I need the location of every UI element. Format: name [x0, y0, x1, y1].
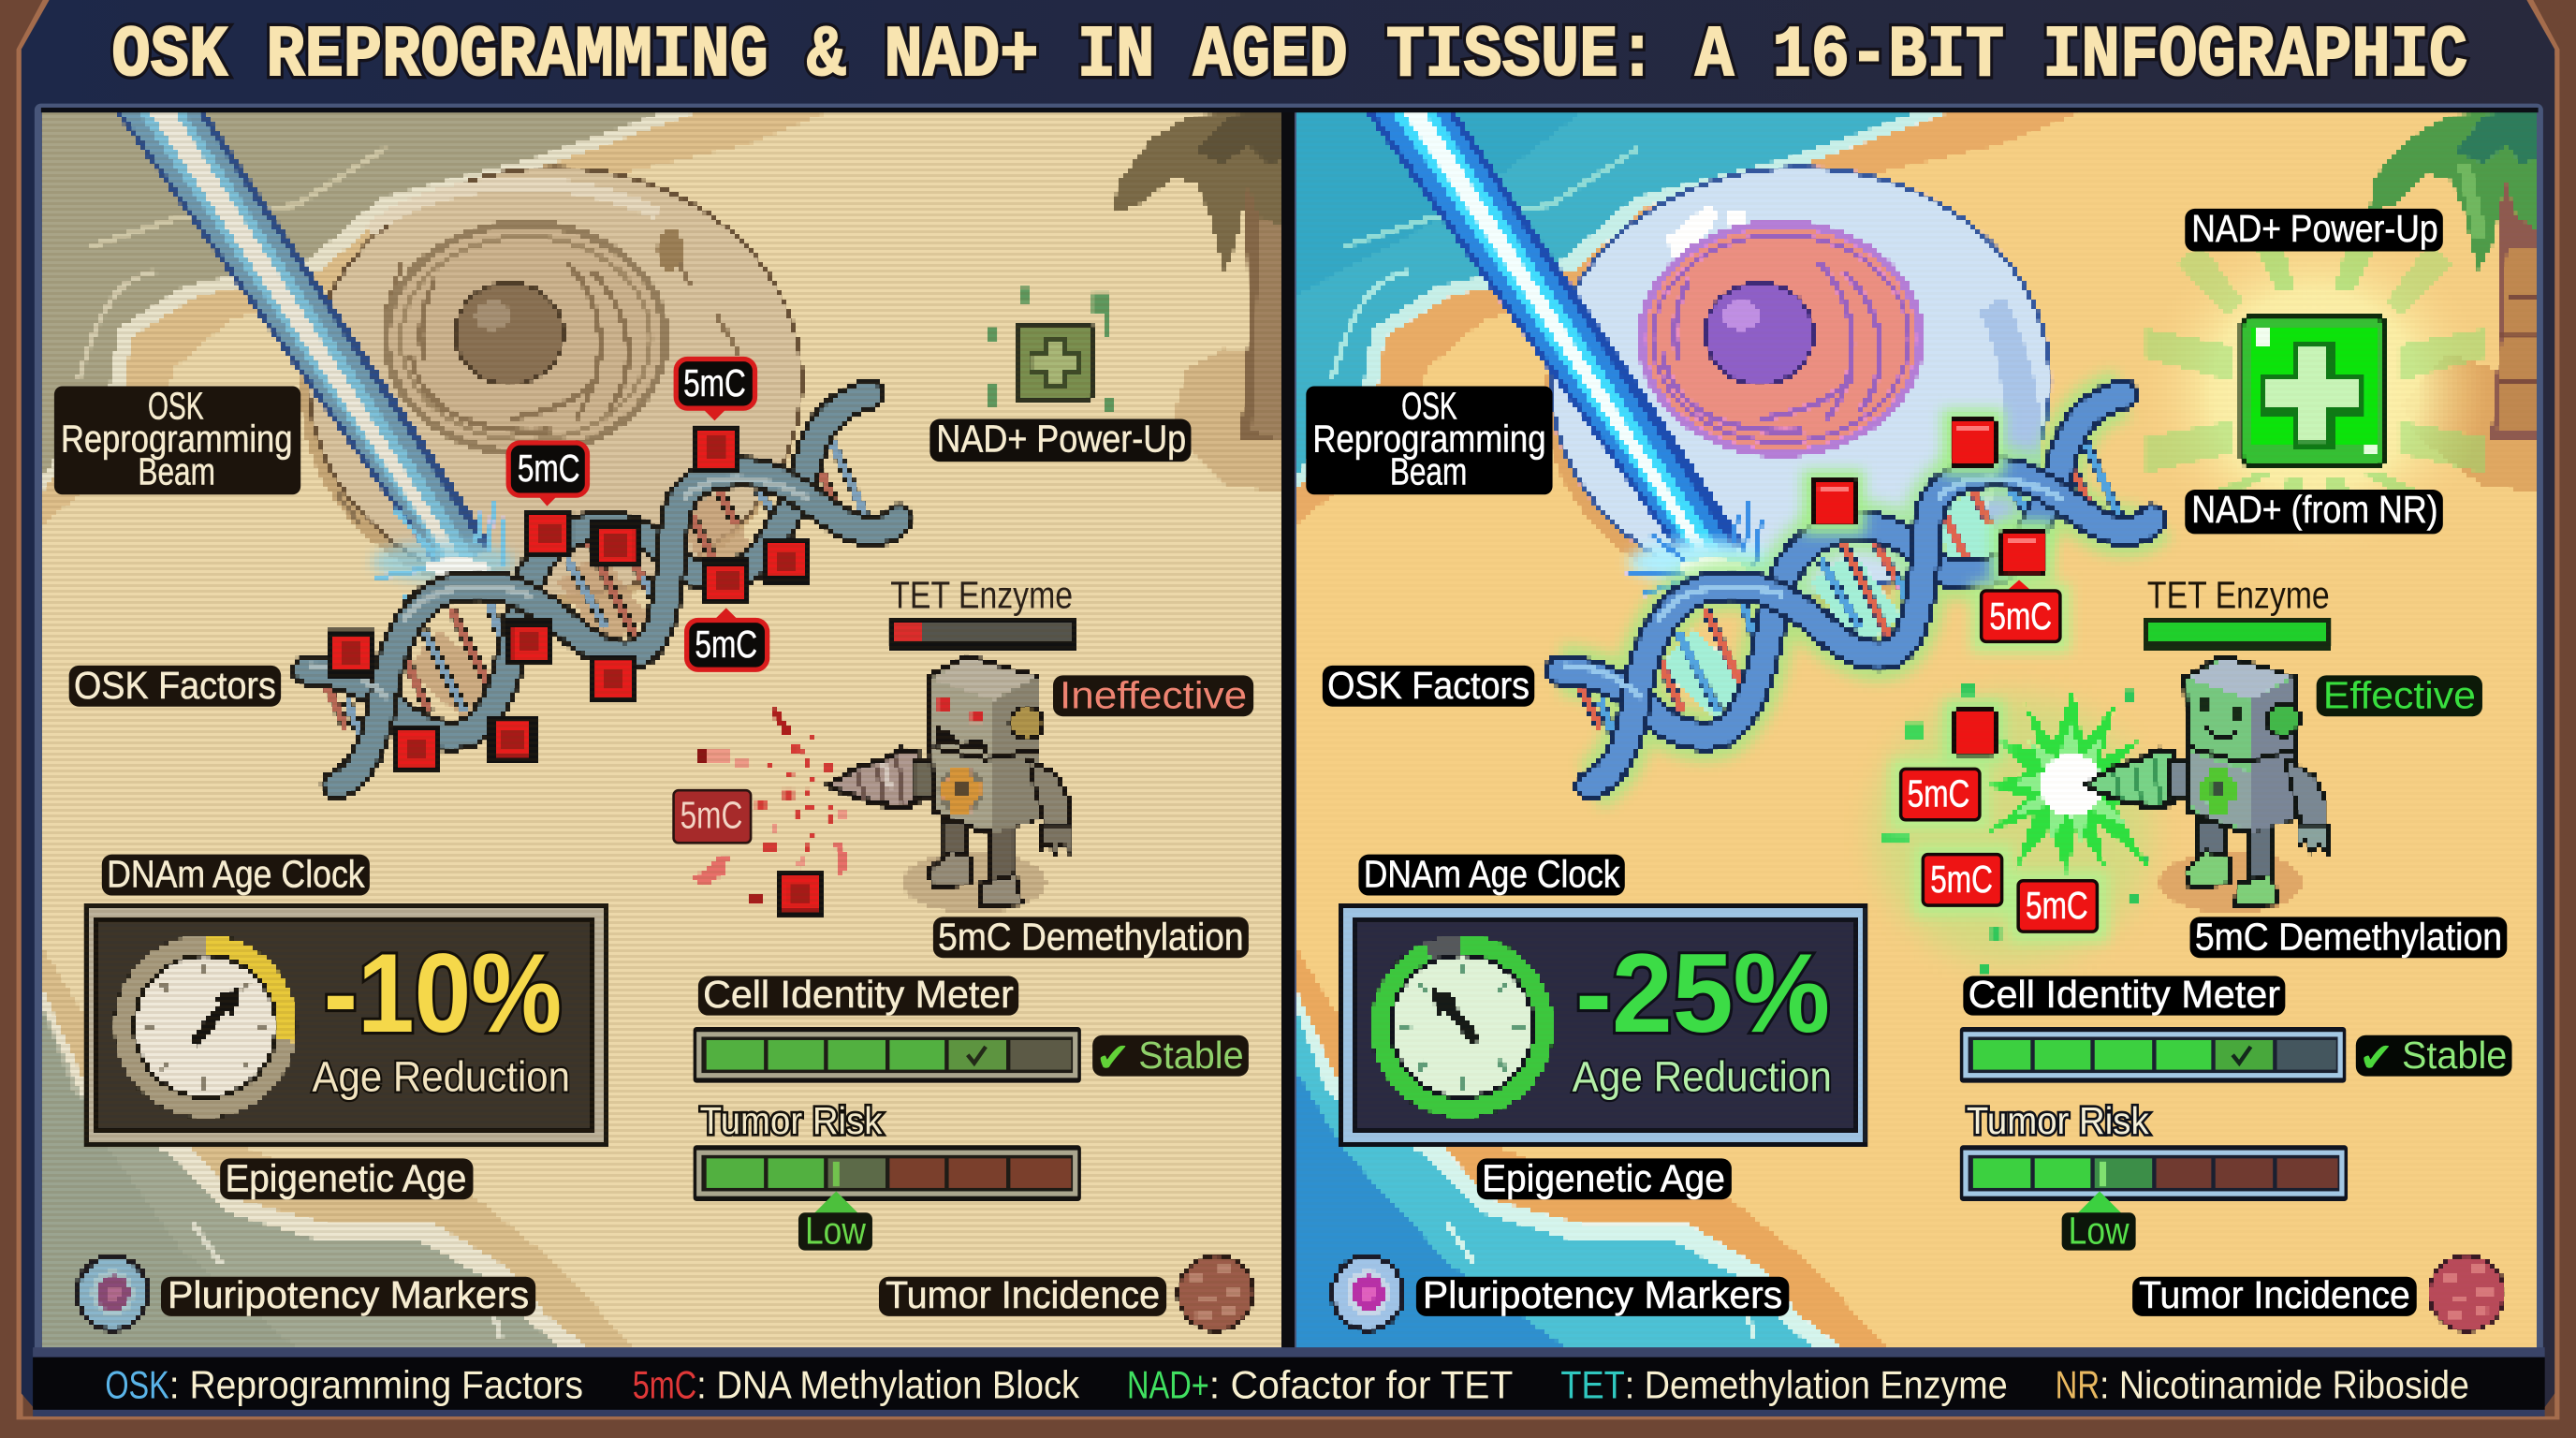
callout: 5mC [676, 359, 754, 420]
methylation blocks on DNA [1802, 409, 2054, 762]
faded 5mC block [674, 790, 751, 843]
DNAm age clock dial [1370, 934, 1554, 1119]
status: Stable: ✔ [1096, 1034, 1130, 1081]
callout: 5mC: 5mC [518, 447, 580, 490]
tumor incidence icon [1177, 1254, 1255, 1332]
status: Stable: Stable [2402, 1034, 2507, 1077]
legend: TET: : Demethylation Enzyme [1625, 1363, 2008, 1407]
legend: NAD+: NAD+ [1127, 1363, 1209, 1407]
legend: TET: TET [1560, 1363, 1625, 1407]
palm shadow on sand [2402, 353, 2539, 493]
label: Age Reduction: Age Reduction [1573, 1052, 1832, 1100]
green glow around DNA [1560, 394, 2152, 785]
callout: 5mC: 5mC [683, 361, 746, 404]
DNA helix (hypermethylated) [307, 394, 899, 785]
legend: NR: : Nicotinamide Riboside [2100, 1363, 2469, 1407]
legend: 5mC: : DNA Methylation Block [696, 1363, 1080, 1407]
legend: NR: NR [2056, 1363, 2100, 1407]
aged cell [300, 168, 801, 605]
label: Pluripotency Markers: Pluripotency Markers [1423, 1273, 1782, 1316]
TET enzyme bar: full [2143, 616, 2333, 649]
label: Tumor Incidence: Tumor Incidence [886, 1273, 1160, 1316]
block: 5mC: 5mC [2026, 884, 2088, 927]
panel inner border top [41, 108, 2539, 112]
age clock panel [1339, 902, 1869, 1147]
label: TET Enzyme: TET Enzyme [2147, 573, 2330, 616]
happy green robot with drill [2080, 655, 2328, 914]
methylation blocks on DNA [327, 424, 825, 917]
callout: 5mC [1982, 580, 2060, 641]
beach water top [41, 111, 829, 526]
label: Cell Identity Meter: Cell Identity Meter [1969, 973, 2280, 1016]
label: OSK Reprogramming Beam: Beam [1390, 450, 1467, 493]
demethylation burst [1873, 682, 2167, 976]
status: Stable [1092, 1034, 1249, 1081]
label: DNAm Age Clock: DNAm Age Clock [107, 853, 365, 896]
label: OSK Factors: OSK Factors [74, 664, 276, 707]
legend: OSK: : Reprogramming Factors [169, 1363, 583, 1407]
callout: 5mC [687, 608, 768, 669]
beach water bottom [1295, 945, 1886, 1347]
sand background [41, 111, 1281, 1347]
legend bar [33, 1347, 2545, 1416]
tumor risk meter [694, 1145, 1081, 1201]
TET enzyme bar: nearly empty [887, 616, 1077, 649]
label: Age Reduction: Age Reduction [312, 1052, 570, 1100]
block: 5mC: 5mC [1930, 858, 1993, 901]
left panel CRT scanlines [41, 111, 1281, 1347]
label: Pluripotency Markers: Pluripotency Markers [168, 1273, 529, 1316]
label: Tumor Incidence: Tumor Incidence [2139, 1273, 2410, 1316]
legend: 5mC: 5mC [633, 1363, 696, 1407]
glow behind 5mC blocks [1891, 583, 2108, 942]
pluripotency marker icon [75, 1254, 151, 1332]
label: Cell Identity Meter: Cell Identity Meter [703, 973, 1014, 1016]
label: TET Enzyme: TET Enzyme [890, 573, 1073, 616]
label: 5mC Demethylation: 5mC Demethylation [2195, 915, 2502, 958]
DNAm age clock dial [113, 934, 298, 1119]
age clock panel [82, 902, 609, 1147]
tumor risk meter [1960, 1145, 2348, 1201]
status: Ineffective: Ineffective [1060, 673, 1247, 716]
marker: Low [798, 1191, 872, 1253]
right panel faint scanlines [1295, 111, 2539, 1347]
DNA helix (clean) [1560, 394, 2152, 785]
callout: 5mC: 5mC [695, 623, 757, 666]
status: Stable: Stable [1138, 1034, 1244, 1077]
left panel illustration [41, 111, 1288, 1347]
panel: rejuvenated tissue (right) [1295, 111, 2539, 1347]
reprogramming beam [1365, 111, 1747, 568]
label: OSK Reprogramming Beam: OSK [1401, 385, 1457, 428]
beach water top [1295, 111, 2083, 526]
label: Epigenetic Age: Epigenetic Age [225, 1156, 466, 1199]
reprogramming beam [115, 111, 493, 568]
cell identity meter [694, 1027, 1081, 1083]
label: NAD+ Power-Up: NAD+ Power-Up [2191, 207, 2438, 250]
beach water bottom [41, 945, 633, 1347]
callout: 5mC: 5mC [1989, 594, 2052, 638]
status: Stable: ✔ [2359, 1034, 2393, 1081]
label: OSK Reprogramming Beam: OSK [148, 385, 204, 428]
palm tree [1114, 111, 1288, 493]
marker: Low: Low [2069, 1210, 2130, 1253]
centre divider [1281, 109, 1295, 1351]
value: -10%: -10% [324, 932, 562, 1056]
sand background [1295, 111, 2539, 1347]
label: Tumor Risk: Tumor Risk [700, 1099, 883, 1142]
label: OSK Reprogramming Beam: Reprogramming [61, 418, 292, 461]
legend: NAD+: : Cofactor for TET [1209, 1363, 1513, 1407]
panel: aged tissue (left) [41, 111, 1288, 1347]
weak NAD+ power-up icon [989, 287, 1114, 413]
rusty robot with drill [823, 655, 1071, 914]
NAD+ power-up glow rays [2144, 220, 2485, 555]
label: OSK Factors: OSK Factors [1327, 664, 1530, 707]
status: Stable [2356, 1034, 2512, 1081]
label: OSK Reprogramming Beam [1306, 385, 1553, 494]
right panel illustration [1295, 111, 2539, 1347]
tumor incidence icon [2427, 1254, 2506, 1332]
callout: 5mC [508, 443, 587, 506]
cell identity meter [1960, 1027, 2346, 1083]
palm tree [2369, 111, 2539, 440]
marker: Low: Low [805, 1210, 867, 1253]
value: -25%: -25% [1575, 932, 1830, 1056]
healthy cell [1544, 168, 2050, 608]
label: 5mC Demethylation: 5mC Demethylation [938, 915, 1244, 958]
legend: OSK: OSK [105, 1363, 169, 1407]
faded 5mC block: 5mC [681, 794, 742, 837]
block: 5mC: 5mC [1908, 772, 1969, 815]
label: OSK Reprogramming Beam: Reprogramming [1312, 418, 1546, 461]
beam impact sparks [1627, 501, 1773, 594]
label: OSK Reprogramming Beam [54, 385, 300, 494]
label: DNAm Age Clock: DNAm Age Clock [1364, 853, 1620, 896]
label: NAD+ Power-Up: NAD+ Power-Up [936, 418, 1186, 461]
pluripotency marker icon [1330, 1254, 1405, 1332]
label: Tumor Risk: Tumor Risk [1967, 1099, 2149, 1142]
status: Effective: Effective [2323, 673, 2476, 716]
marker: Low [2062, 1191, 2136, 1253]
label: NAD+ (from NR): NAD+ (from NR) [2191, 488, 2438, 531]
label: Epigenetic Age: Epigenetic Age [1482, 1156, 1725, 1199]
label: OSK Reprogramming Beam: Beam [138, 450, 215, 493]
beam impact sparks [372, 501, 516, 600]
broken methylation debris [692, 708, 849, 905]
NAD+ power-up icon [2239, 315, 2389, 466]
